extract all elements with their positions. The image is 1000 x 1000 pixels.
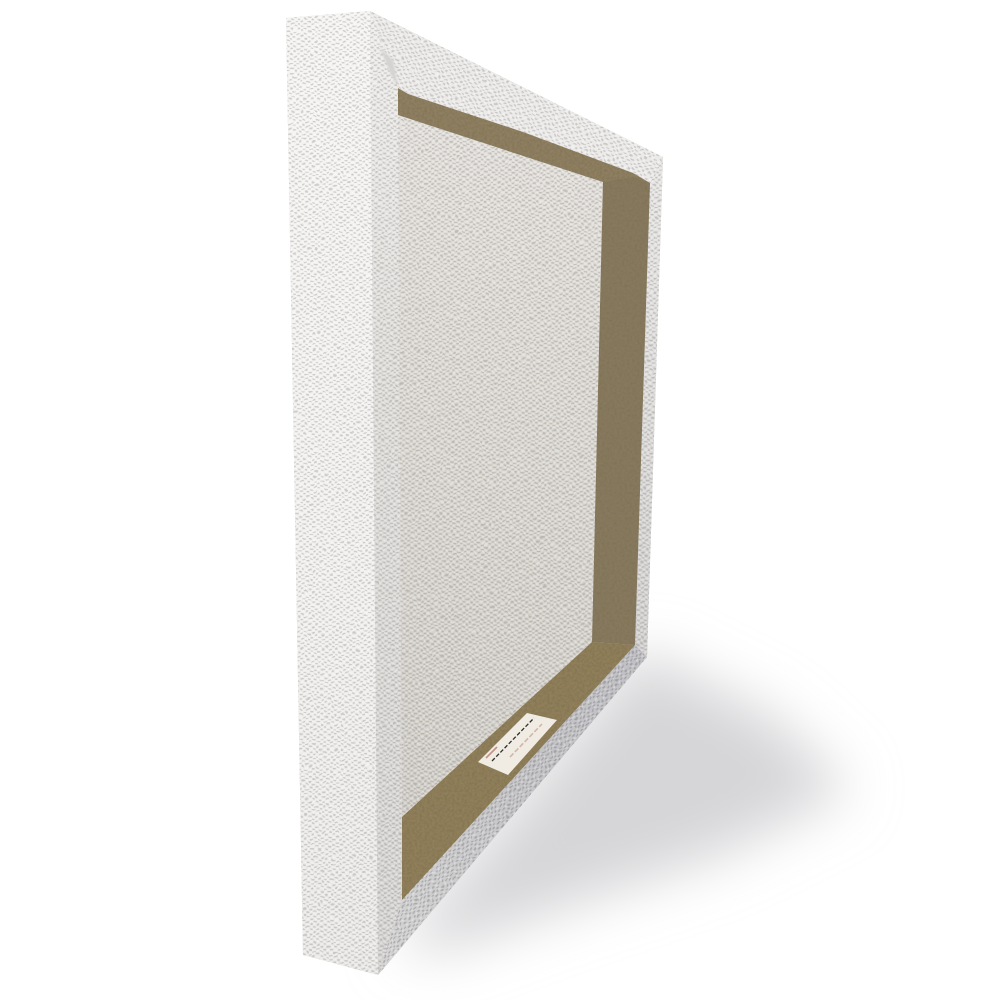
frame base silhouette bbox=[286, 11, 663, 975]
stretched canvas panel bbox=[395, 110, 607, 820]
front face: right rail bbox=[635, 158, 663, 656]
floor shadow bbox=[395, 650, 850, 950]
fold crease at top corner bbox=[380, 48, 398, 88]
front face: left rail bbox=[370, 12, 402, 974]
front face: bottom rail bbox=[375, 640, 655, 980]
left side face bbox=[286, 11, 378, 975]
front face: top rail bbox=[370, 12, 662, 182]
canvas frame bbox=[280, 5, 670, 985]
product label bbox=[478, 713, 557, 775]
top inner wood bbox=[398, 88, 650, 183]
right inner wood bbox=[592, 177, 650, 645]
bottom inner wood bbox=[402, 642, 635, 900]
